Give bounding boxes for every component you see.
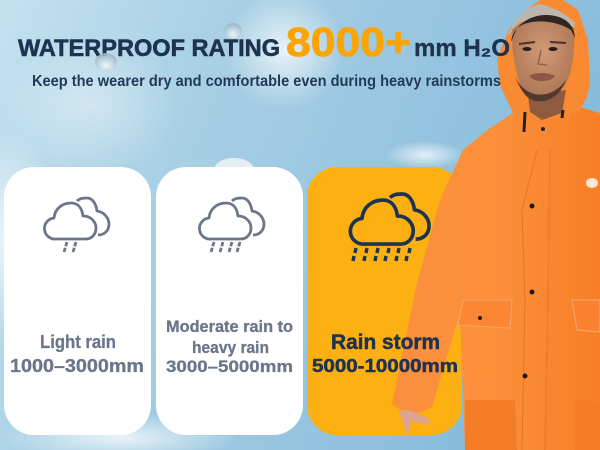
panel: rain storm	[307, 167, 462, 435]
hair	[511, 15, 575, 42]
label: 1000-3000mm: 1000–3000mm	[10, 356, 144, 376]
face	[512, 18, 574, 100]
figure: man wearing orange raincoat	[392, 0, 600, 450]
hand	[399, 410, 430, 437]
coat body and sleeve	[392, 105, 600, 450]
nose and mouth	[538, 50, 547, 65]
panel: moderate to heavy rain	[156, 167, 303, 435]
buttons	[530, 204, 534, 208]
water drop over title	[95, 53, 117, 71]
pockets	[458, 300, 512, 328]
drawstrings	[524, 110, 563, 132]
label: light rain: Light rain	[40, 332, 116, 352]
neck	[528, 90, 566, 120]
icon: cloud with moderate rain	[199, 198, 264, 252]
title: unit: mm H₂O	[414, 35, 510, 62]
subtitle: Keep the wearer dry and comfortable even during heavy rainstorms	[32, 73, 501, 90]
darker lower coat band	[465, 400, 600, 450]
panel: light rain	[4, 167, 151, 435]
coat front seam	[522, 150, 537, 450]
label: 3000-5000mm: 3000–5000mm	[166, 357, 293, 376]
logo	[586, 178, 598, 188]
label: rain storm: Rain storm	[331, 331, 440, 354]
label: moderate rain to heavy rain: Moderate rain to	[166, 317, 293, 336]
title: 8000+ figure: 8000+	[286, 19, 411, 65]
icon: cloud with light rain	[44, 198, 109, 252]
beard	[515, 76, 566, 101]
label: 5000-10000mm: 5000-10000mm	[312, 356, 458, 376]
hood	[497, 0, 590, 120]
hood lining	[507, 4, 575, 37]
icon: cloud with storm rain	[350, 194, 429, 261]
title: waterproof rating: WATERPROOF RATING	[18, 35, 280, 62]
label: heavy rain: heavy rain	[192, 338, 269, 357]
eyes	[519, 42, 566, 44]
